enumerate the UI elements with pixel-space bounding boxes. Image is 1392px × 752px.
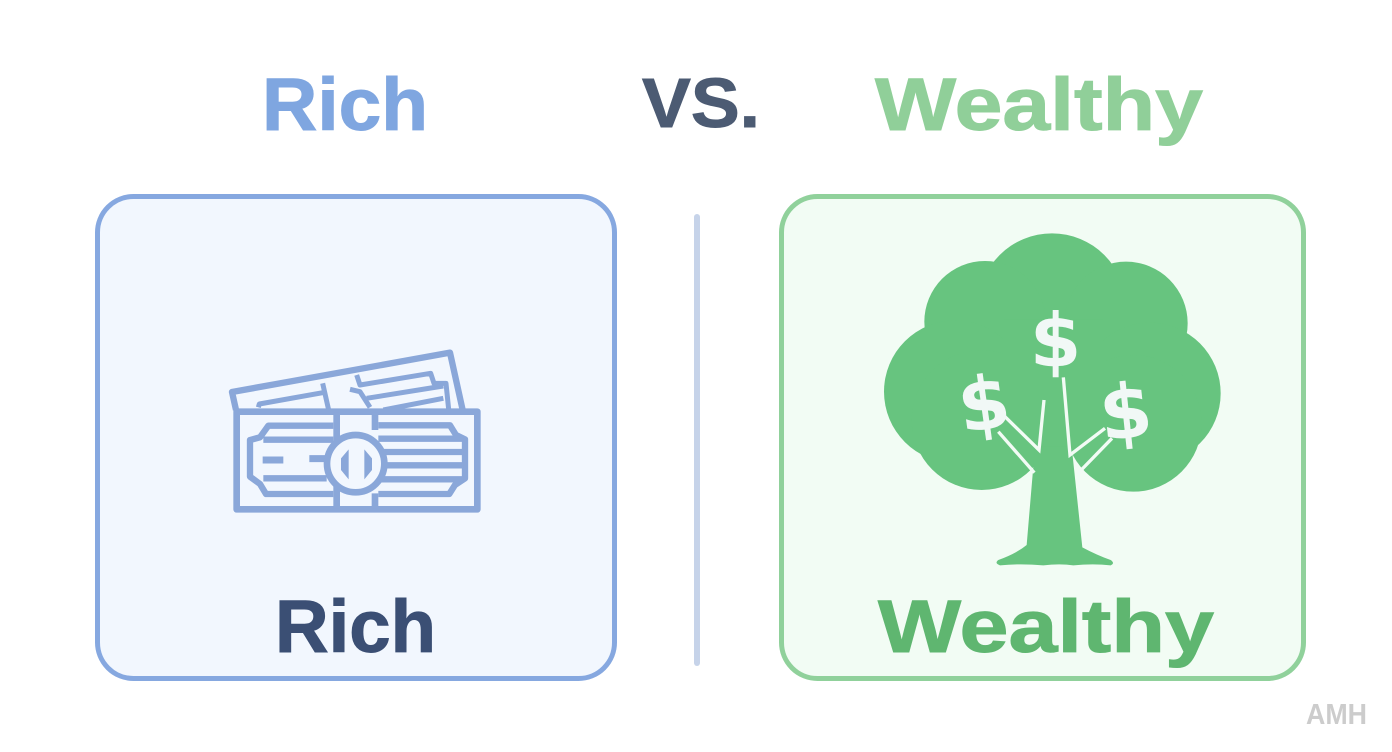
panel label: Wealthy: Wealthy xyxy=(878,585,1214,668)
banknote right engraving xyxy=(378,425,465,494)
dollar sign: right: $ xyxy=(1095,366,1156,459)
icon: stack of banknotes xyxy=(232,353,477,509)
dollar sign: left: $ xyxy=(953,358,1015,451)
heading: VS.: VS. xyxy=(642,64,760,142)
branch outlines xyxy=(998,377,1112,474)
divider xyxy=(694,214,700,666)
dollar sign: top: $ xyxy=(1030,299,1081,385)
panel label: Rich: Rich xyxy=(275,585,436,668)
back banknote xyxy=(232,353,463,410)
panel: Rich xyxy=(98,196,614,678)
tree trunk xyxy=(997,447,1113,565)
heading: Wealthy: Wealthy xyxy=(875,63,1203,146)
banknote left engraving xyxy=(250,426,333,494)
heading: Rich: Rich xyxy=(262,63,428,146)
panel: Wealthy xyxy=(782,196,1304,678)
watermark: AMH xyxy=(1306,699,1367,731)
icon: money tree xyxy=(884,233,1221,565)
tree crown xyxy=(884,233,1221,492)
central seal xyxy=(327,435,384,492)
front banknote xyxy=(237,412,477,509)
